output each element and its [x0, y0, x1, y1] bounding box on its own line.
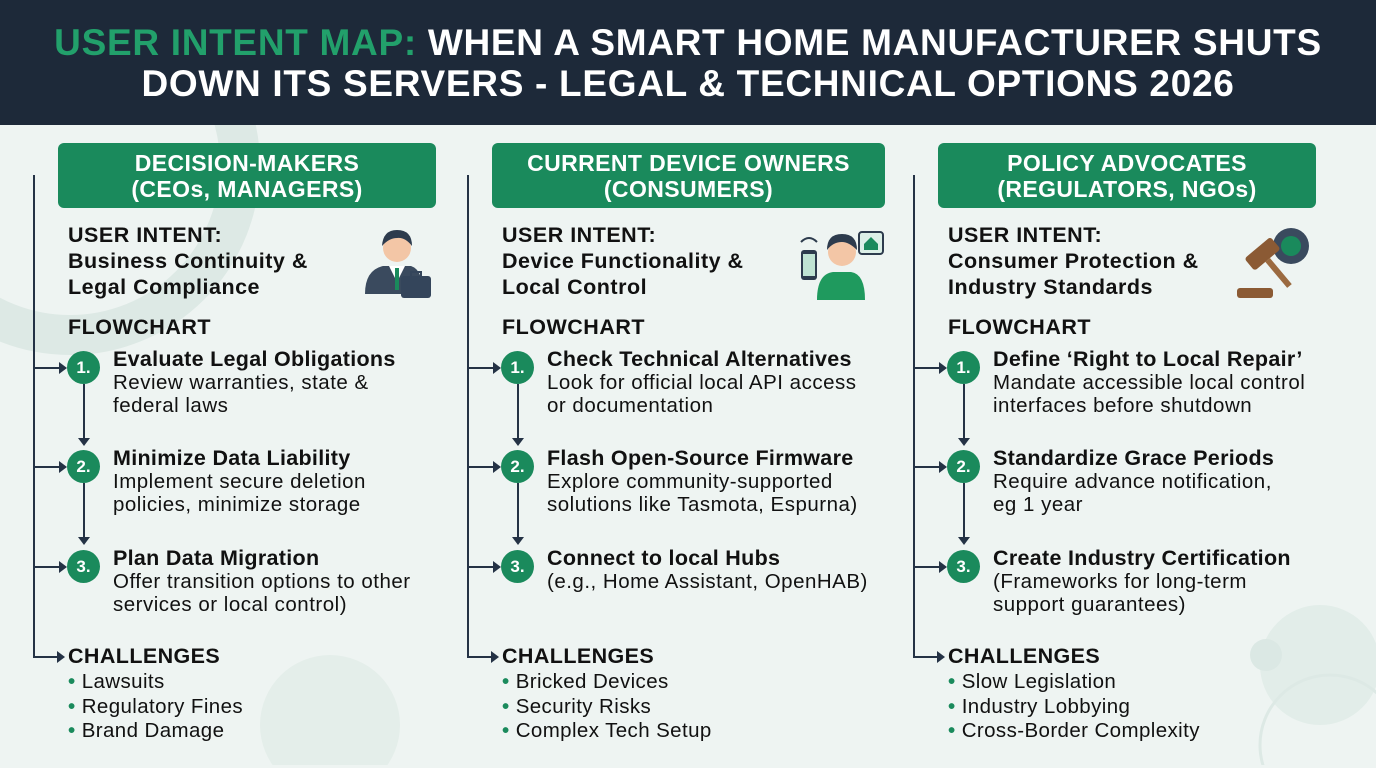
- heading: (REGULATORS, NGOs): [997, 176, 1257, 202]
- step 1: interfaces before shutdown: [993, 394, 1252, 417]
- user intent text: Consumer Protection &: [948, 249, 1199, 273]
- step 3: [469, 546, 868, 593]
- step 3: [35, 546, 411, 616]
- challenges: Brand Damage: [82, 719, 224, 742]
- challenges: Cross-Border Complexity: [962, 719, 1200, 742]
- user intent text: USER INTENT:: [68, 223, 222, 247]
- heading: (CEOs, MANAGERS): [131, 176, 363, 202]
- step 1: or documentation: [547, 394, 713, 417]
- step 2: 2.: [956, 457, 971, 476]
- step 2: [35, 446, 366, 516]
- panel: policy advocates: [913, 143, 1316, 742]
- step 3: Connect to local Hubs: [547, 546, 780, 570]
- step 2: solutions like Tasmota, Espurna): [547, 493, 858, 516]
- challenges: Regulatory Fines: [82, 694, 243, 718]
- step 2: eg 1 year: [993, 493, 1083, 516]
- icon: consumer with phone: [800, 231, 884, 300]
- heading: [58, 143, 436, 208]
- challenges: Complex Tech Setup: [516, 719, 712, 742]
- step 2: Explore community-supported: [547, 470, 833, 493]
- challenges: Security Risks: [516, 694, 651, 718]
- step 1: Evaluate Legal Obligations: [113, 347, 396, 371]
- step 2: 2.: [76, 457, 91, 476]
- step 2: Standardize Grace Periods: [993, 446, 1274, 470]
- step 1: federal laws: [113, 394, 228, 417]
- user intent text: Legal Compliance: [68, 275, 260, 299]
- step 2: Minimize Data Liability: [113, 446, 350, 470]
- challenges: [35, 644, 243, 742]
- step 1: [915, 347, 1305, 417]
- title: USER INTENT MAP: WHEN A SMART HOME MANUFACTURER SHUTS: [54, 22, 1322, 63]
- user intent text: Industry Standards: [948, 275, 1153, 299]
- challenges: Bricked Devices: [516, 670, 669, 693]
- heading: flowchart: FLOWCHART: [502, 315, 645, 339]
- user intent text: Business Continuity &: [68, 249, 308, 273]
- step 1: Mandate accessible local control: [993, 371, 1305, 394]
- challenges: Industry Lobbying: [962, 694, 1130, 718]
- user intent text: Local Control: [502, 275, 647, 299]
- challenges: [469, 644, 712, 742]
- challenges: CHALLENGES: [68, 644, 220, 668]
- step 1: Define ‘Right to Local Repair’: [993, 347, 1303, 371]
- step 2: 2.: [510, 457, 525, 476]
- step 1: Look for official local API access: [547, 371, 856, 394]
- icon: gavel and gear: [1237, 228, 1309, 298]
- step 3: services or local control): [113, 593, 347, 616]
- step 2: policies, minimize storage: [113, 493, 361, 516]
- step 3: [915, 546, 1291, 616]
- user intent text: USER INTENT:: [948, 223, 1102, 247]
- challenges: Lawsuits: [82, 670, 165, 693]
- step 1: 1.: [76, 358, 91, 377]
- step 1: Check Technical Alternatives: [547, 347, 852, 371]
- step 3: 3.: [510, 557, 525, 576]
- step 2: [469, 446, 858, 516]
- step 1: [469, 347, 856, 417]
- user intent text: USER INTENT:: [502, 223, 656, 247]
- step 1: 1.: [510, 358, 525, 377]
- heading: (CONSUMERS): [604, 176, 773, 202]
- step 3: 3.: [76, 557, 91, 576]
- user intent text: [68, 223, 308, 299]
- heading: CURRENT DEVICE OWNERS: [527, 150, 850, 176]
- challenges: Slow Legislation: [962, 670, 1116, 693]
- panel: current device owners: [467, 143, 885, 742]
- step 3: Offer transition options to other: [113, 570, 411, 593]
- user intent text: [502, 223, 744, 299]
- step 3: (Frameworks for long-term: [993, 570, 1247, 593]
- heading: POLICY ADVOCATES: [1007, 150, 1247, 176]
- step 3: support guarantees): [993, 593, 1186, 616]
- step 2: Require advance notification,: [993, 470, 1272, 493]
- step 3: 3.: [956, 557, 971, 576]
- heading: [938, 143, 1316, 208]
- title: DOWN ITS SERVERS - LEGAL & TECHNICAL OPTIONS 2026: [141, 63, 1235, 104]
- step 3: (e.g., Home Assistant, OpenHAB): [547, 570, 868, 593]
- icon: businessman: [365, 230, 431, 298]
- challenges: CHALLENGES: [502, 644, 654, 668]
- challenges: CHALLENGES: [948, 644, 1100, 668]
- step 2: Flash Open-Source Firmware: [547, 446, 854, 470]
- step 3: Create Industry Certification: [993, 546, 1291, 570]
- step 2: [915, 446, 1274, 516]
- heading: flowchart: FLOWCHART: [948, 315, 1091, 339]
- step 1: [35, 347, 396, 417]
- title: [0, 0, 1376, 125]
- heading: DECISION-MAKERS: [135, 150, 359, 176]
- heading: [492, 143, 885, 208]
- step 1: Review warranties, state &: [113, 371, 369, 394]
- panel: decision-makers: [33, 143, 436, 742]
- user intent text: Device Functionality &: [502, 249, 744, 273]
- step 2: Implement secure deletion: [113, 470, 366, 493]
- step 3: Plan Data Migration: [113, 546, 319, 570]
- challenges: [915, 644, 1200, 742]
- step 1: 1.: [956, 358, 971, 377]
- user intent text: [948, 223, 1199, 299]
- heading: flowchart: FLOWCHART: [68, 315, 211, 339]
